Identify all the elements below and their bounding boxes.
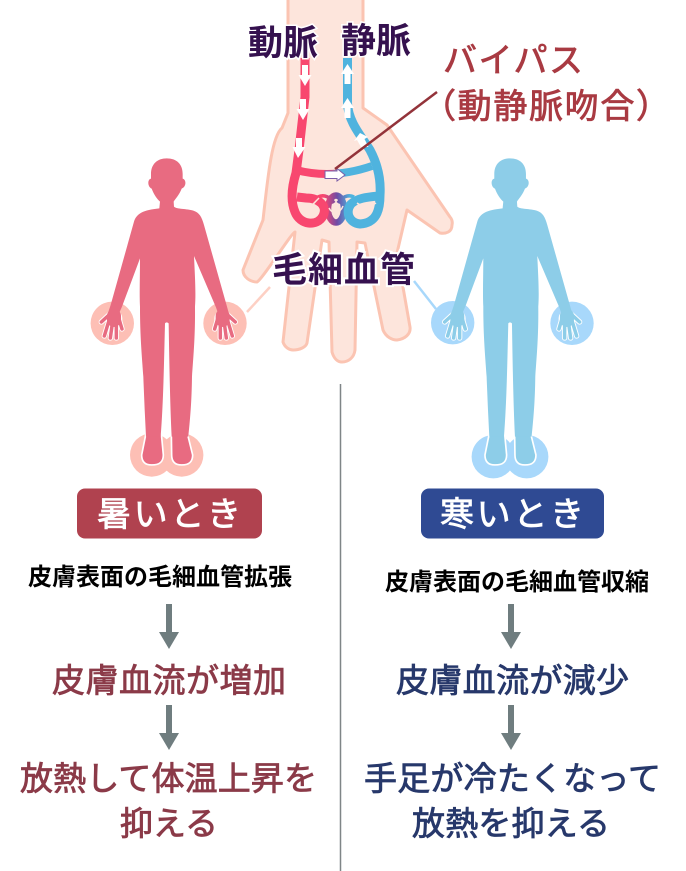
hot result text: 抑える <box>120 805 218 842</box>
cold step 2 text: 皮膚血流が減少 <box>396 662 629 699</box>
warm highlight circles <box>91 302 247 477</box>
heading badge: cold: 寒いとき <box>440 496 584 534</box>
bypass vessel <box>296 166 372 174</box>
cold arrow 1 <box>501 604 521 649</box>
hot step 2 text: 皮膚血流が増加 <box>52 662 286 699</box>
capillary strands <box>318 196 354 203</box>
hot arrow 2 <box>159 705 179 750</box>
feet white outline <box>142 433 193 465</box>
cold result text: 手足が冷たくなって <box>364 760 661 797</box>
cold step 1 text: 皮膚表面の毛細血管収縮 <box>385 569 649 596</box>
hand illustration with blood vessels <box>243 0 452 362</box>
heading badge: hot <box>77 488 262 538</box>
cold highlight circles <box>431 301 594 478</box>
label: artery: 動脈 <box>248 24 318 63</box>
cold body figure <box>431 158 594 478</box>
heading badge: cold <box>421 488 604 538</box>
cold arrow 2 <box>501 705 521 750</box>
label: vein: 静脈 <box>341 22 411 61</box>
label: bypass: バイパス <box>443 42 583 80</box>
leader: blue hand to capillaries <box>414 281 436 309</box>
hand outline <box>243 0 452 362</box>
heading badge: hot: 暑いとき <box>97 496 241 534</box>
cold result text <box>364 760 661 842</box>
hot body figure <box>91 158 247 477</box>
cold result text: 放熱を抑える <box>412 805 610 842</box>
bypass leader line <box>335 92 437 169</box>
hot result text <box>20 760 317 842</box>
feet white outline <box>485 433 536 465</box>
flow arrows <box>292 64 368 181</box>
purple capillary ring <box>328 196 344 222</box>
label: capillaries: 毛細血管 <box>272 251 415 290</box>
center divider line <box>340 384 342 871</box>
leader: pink hand to capillaries <box>247 287 270 312</box>
hot result text: 放熱して体温上昇を <box>20 760 317 797</box>
hot arrow 1 <box>159 604 179 649</box>
vein <box>348 58 380 224</box>
artery <box>292 58 324 223</box>
label: arteriovenous anastomosis: （動静脈吻合） <box>422 88 670 126</box>
capillary fine crossings <box>303 198 376 213</box>
hot step 1 text: 皮膚表面の毛細血管拡張 <box>28 564 292 591</box>
